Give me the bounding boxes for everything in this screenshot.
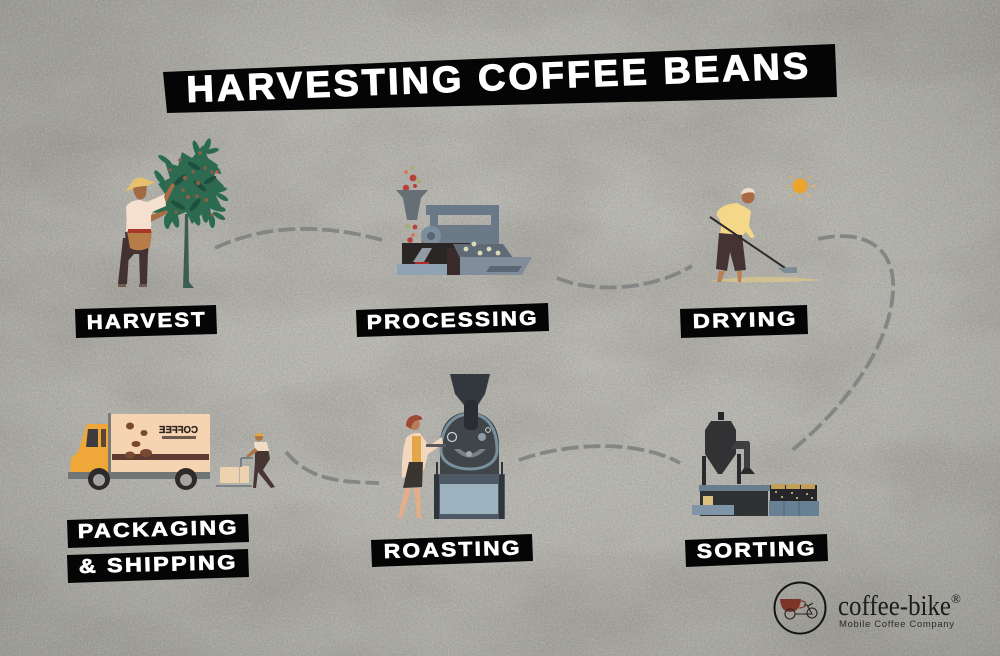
icon: roaster and woman bbox=[398, 374, 505, 519]
dashed route: sorting to roasting bbox=[519, 446, 680, 463]
label: and shipping bbox=[67, 549, 249, 583]
icon: sorting machine bbox=[692, 412, 819, 516]
label: harvest bbox=[75, 305, 217, 338]
title: HARVESTING COFFEE BEANS bbox=[186, 45, 812, 110]
logo: coffee-bike bbox=[774, 582, 961, 634]
label: packaging: PACKAGING bbox=[78, 517, 239, 543]
icon: harvest worker and coffee tree bbox=[118, 137, 229, 288]
logo tagline: Mobile Coffee Company bbox=[839, 619, 954, 630]
label: drying: DRYING bbox=[693, 308, 798, 333]
logo wordmark: coffee-bike bbox=[838, 591, 951, 622]
mirrored truck lettering: COFFEE bbox=[159, 424, 198, 436]
icon: processing machine bbox=[396, 166, 532, 275]
registered mark: ® bbox=[951, 591, 961, 606]
label: sorting bbox=[685, 534, 828, 567]
icon: delivery truck and worker bbox=[68, 413, 275, 490]
foliage mass bbox=[157, 145, 224, 228]
logo emblem bbox=[774, 582, 826, 634]
label: drying bbox=[680, 305, 808, 338]
icon: drying worker with rake and sun bbox=[708, 172, 824, 282]
label: roasting: ROASTING bbox=[384, 537, 522, 563]
dashed route: processing to drying bbox=[557, 266, 692, 287]
label: packaging bbox=[67, 514, 249, 548]
dashed route: drying to sorting bbox=[790, 236, 893, 452]
label: roasting bbox=[371, 534, 533, 567]
label: processing bbox=[356, 303, 549, 337]
label: sorting: SORTING bbox=[697, 538, 817, 563]
label: harvest: HARVEST bbox=[87, 309, 207, 334]
dashed route: roasting to packaging bbox=[286, 452, 379, 483]
label: processing: PROCESSING bbox=[367, 308, 539, 334]
dashed route: harvest to processing bbox=[215, 229, 382, 248]
label: and shipping: & SHIPPING bbox=[79, 552, 238, 578]
